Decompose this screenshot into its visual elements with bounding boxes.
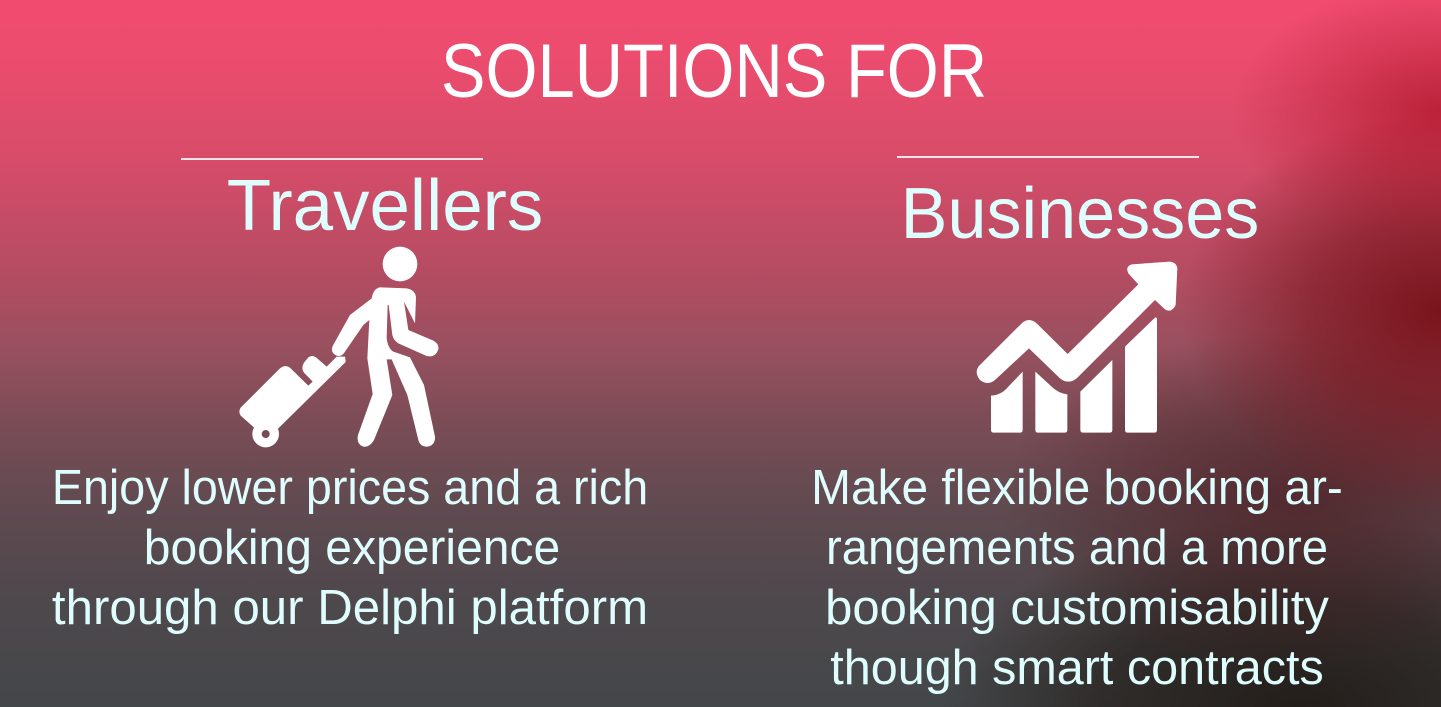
text: travellers description: booking experience [144, 521, 560, 575]
text: travellers description: through our Delphi platform [52, 581, 648, 635]
title: SOLUTIONS FOR [440, 29, 987, 114]
text: businesses description: though smart contracts [830, 641, 1324, 695]
heading: Travellers: Travellers [227, 166, 543, 246]
heading: Businesses: Businesses [901, 174, 1259, 254]
text: businesses description [811, 461, 1343, 695]
text: businesses description: Make flexible booking ar- [811, 461, 1343, 515]
text: travellers description [52, 461, 648, 635]
text: businesses description: booking customisability [825, 581, 1329, 635]
text: businesses description: rangements and a more [826, 521, 1328, 575]
text: travellers description: Enjoy lower prices and a rich [52, 461, 648, 515]
